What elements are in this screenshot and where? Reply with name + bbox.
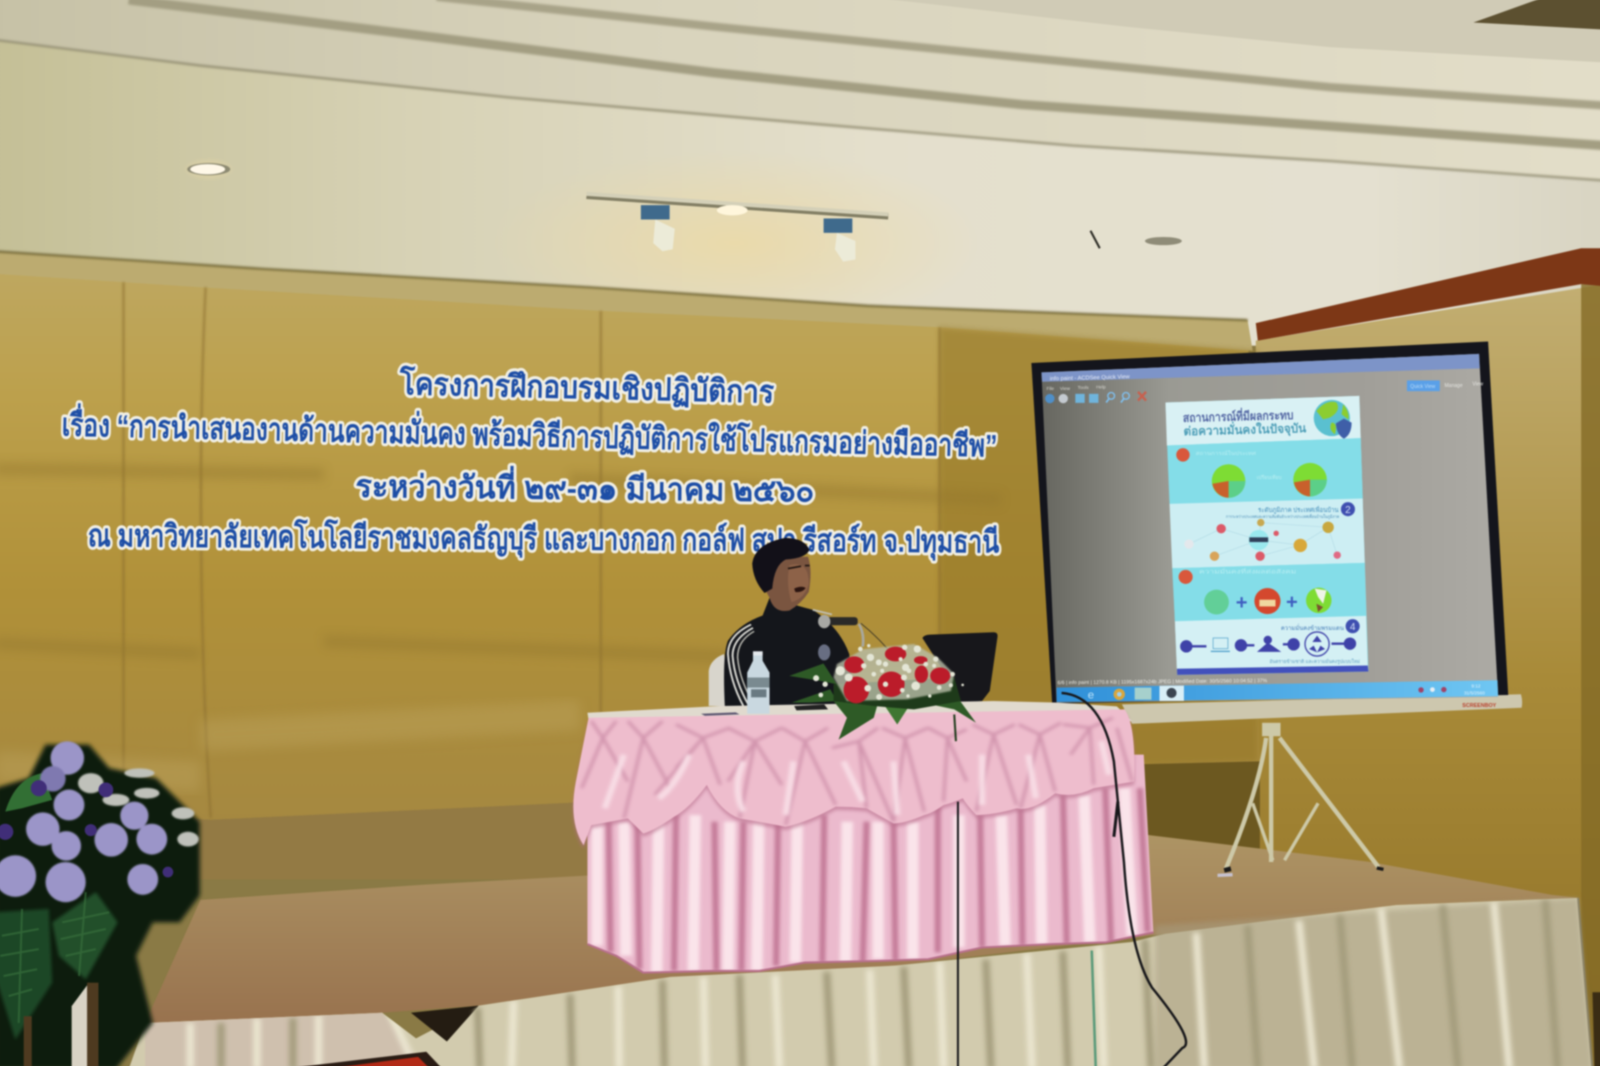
- pie chart right: [1293, 463, 1327, 496]
- section 4: อันตรายข้ามชาติ และความมั่นคงรูปแบบใหม่: [1269, 658, 1360, 665]
- jacket: [724, 598, 855, 708]
- table top: [587, 701, 1132, 725]
- globe icon: [1314, 400, 1352, 439]
- stands and white cloth: [72, 983, 89, 1066]
- face: [765, 557, 811, 611]
- ferns: [0, 909, 52, 1040]
- red carnations: [844, 647, 950, 703]
- section 2: การระหว่างประเทศและความสัมพันธ์ระหว่างประเทศเพื่อนบ้านในภูมิภาค: [1226, 513, 1339, 520]
- quick view tabs: [1407, 380, 1483, 391]
- paper and remote on table: [701, 712, 740, 716]
- pie chart left: [1212, 464, 1245, 498]
- title bar: [1041, 354, 1480, 382]
- infographic header: สถานการณ์ที่มีผลกระทบ: [1183, 406, 1294, 425]
- banner line 1: โครงการฝึกอบรมเชิงปฏิบัติการ: [399, 364, 775, 410]
- banner line 3: ระหว่างวันที่ ๒๙-๓๑ มีนาคม ๒๕๖๐: [355, 464, 814, 509]
- white baby breath: [813, 644, 964, 700]
- roller bar: [1122, 694, 1522, 724]
- projected infographic page: [1166, 396, 1368, 675]
- section 2: 2: [1345, 505, 1351, 516]
- quick view tabs: Manage: [1445, 383, 1463, 389]
- section 3: [1172, 563, 1366, 621]
- section 4: [1175, 616, 1368, 671]
- laptop: [922, 632, 998, 704]
- flower arrangement: [789, 644, 976, 741]
- hydrangea blossoms: [0, 741, 167, 902]
- brand on roller: SCREENBOY: [1462, 703, 1497, 709]
- pink table skirt: [587, 755, 1153, 973]
- track light: [586, 194, 888, 262]
- purple flower plant: [0, 741, 200, 1066]
- footer strip: [1177, 665, 1368, 675]
- presenter: [724, 538, 855, 708]
- infographic header: ต่อความมั่นคงในปัจจุบัน: [1183, 419, 1307, 439]
- hair: [752, 538, 810, 593]
- infographic header: [1166, 396, 1361, 445]
- ceiling downlight: [182, 157, 235, 182]
- quick view tabs: View: [1472, 381, 1483, 387]
- microphone: [818, 615, 888, 649]
- pink bows and swags: [573, 709, 1134, 849]
- stage carpet: [145, 834, 1578, 1023]
- taskbar: e: [1088, 689, 1094, 701]
- toolbar: [1045, 384, 1146, 403]
- vent: [1473, 0, 1600, 30]
- section 4: ความมั่นคงข้ามพรมแดน: [1281, 624, 1344, 632]
- chain icons: [1181, 632, 1355, 656]
- foliage: [0, 745, 200, 1066]
- banner line 4: ณ มหาวิทยาลัยเทคโนโลยีราชมงคลธัญบุรี และบางกอก กอล์ฟ สปา รีสอร์ท จ.ปทุมธานี: [88, 516, 1000, 561]
- ceiling: [0, 0, 1600, 346]
- yellow curtain backdrop: [0, 251, 1260, 820]
- white stage skirting: [129, 898, 1592, 1066]
- chair: [709, 654, 732, 706]
- banner line 2: เรื่อง “การนำเสนองานด้านความมั่นคง พร้อมวิธีการปฏิบัติการใช้โปรแกรมอย่างมืออาชีพ”: [61, 402, 998, 464]
- section 3: +: [1236, 592, 1248, 614]
- toolbar: File: [1046, 386, 1054, 391]
- title bar: info paint - ACDSee Quick View: [1050, 374, 1131, 382]
- section 1: เปรียบเทียบ: [1257, 474, 1282, 481]
- section 1: สถานการณ์ในประเทศ: [1196, 450, 1257, 457]
- taskbar: 31/5/2560: [1464, 690, 1485, 695]
- status bar: 6/6 | info paint | 1270.8 KB | 1195x1687x24b JPEG | Modified Date: 30/5/2560 10:04:52 | 37%: [1057, 678, 1268, 686]
- network diagram: [1184, 519, 1341, 561]
- section 1: [1167, 438, 1363, 504]
- floor corner: [1592, 992, 1600, 1066]
- white blossoms: [78, 768, 199, 847]
- riser wall below curtain: [0, 761, 1260, 879]
- toolbar: Help: [1096, 384, 1106, 389]
- projection screen: [1031, 342, 1522, 724]
- fern leaves: [789, 663, 976, 741]
- dark purple buds: [0, 780, 173, 877]
- toolbar: View: [1060, 386, 1071, 391]
- section 3: ความมั่นคงที่ส่งผลต่อสังคม: [1199, 568, 1297, 576]
- taskbar: 9:12: [1471, 684, 1481, 689]
- right wall with brown trim: [1256, 248, 1600, 1066]
- quick view tabs: Quick View: [1410, 384, 1436, 390]
- cables: [958, 693, 1186, 1066]
- taskbar: [1057, 680, 1498, 702]
- section 2: ระดับภูมิภาค ประเทศเพื่อนบ้าน: [1258, 505, 1339, 514]
- section 4: 4: [1350, 622, 1356, 633]
- head table with presenter: [573, 538, 1153, 973]
- section 2: [1170, 498, 1365, 568]
- red box at the bottom: [280, 1052, 443, 1066]
- section 3: +: [1286, 591, 1298, 613]
- screen tripod stand: [1217, 723, 1383, 875]
- white mass behind the blooms: [834, 644, 954, 701]
- projected desktop: [1041, 354, 1498, 703]
- toolbar: Tools: [1078, 385, 1089, 390]
- screen frame: [1031, 342, 1508, 704]
- water bottle: [747, 651, 770, 714]
- banner text: [61, 364, 1000, 561]
